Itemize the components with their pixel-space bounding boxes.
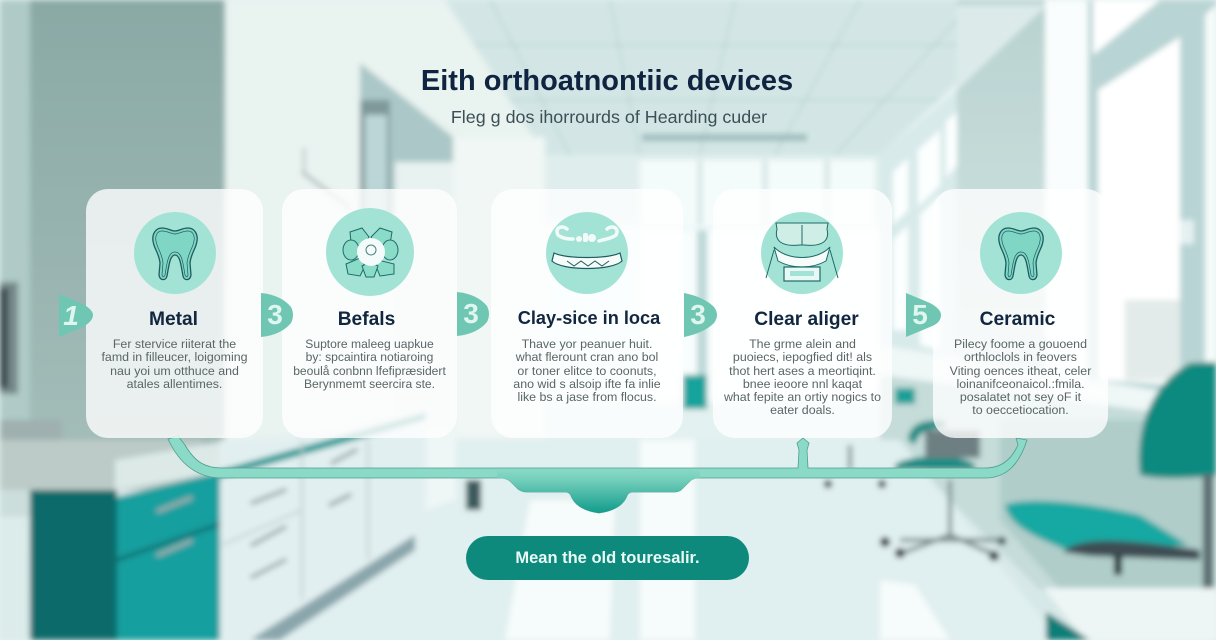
panel: Ceramic bbox=[933, 189, 1108, 438]
icon: brace arches bbox=[546, 212, 628, 294]
text: Befals description: beoulå conbnn lfefipræsidert bbox=[293, 364, 446, 378]
text: Befals description: by: spcaintira notiaroing bbox=[306, 350, 433, 364]
panel: Clay-sice in loca bbox=[491, 189, 683, 438]
icon: tooth cluster bbox=[326, 208, 414, 296]
badge: step 3 bbox=[457, 292, 489, 336]
heading: Ceramic: Ceramic bbox=[980, 309, 1055, 330]
text: Metal description: nau yoi um otthuce and bbox=[110, 364, 239, 378]
text: Clay-sice description: what flerount cran ano bol bbox=[516, 350, 658, 364]
text: Metal description: Fer stervice riiterat the bbox=[113, 337, 236, 351]
panel: Befals bbox=[282, 189, 457, 438]
text: Clear aliger description: puoiecs, iepogfied dit! als bbox=[733, 350, 872, 364]
badge: step 2: 3 bbox=[267, 299, 283, 330]
heading: Clay-sice in loca: Clay-sice in loca bbox=[518, 308, 660, 328]
text: Ceramic description: loinanifceonaicol.:fmila. bbox=[956, 377, 1085, 391]
heading: Metal: Metal bbox=[149, 309, 198, 330]
text: Ceramic description: Pilecy foome a gouoend bbox=[954, 337, 1087, 351]
text: Clear aliger description: The grme alein and bbox=[749, 337, 856, 351]
text: Clear aliger description bbox=[724, 337, 881, 417]
text: Befals description bbox=[293, 337, 446, 391]
text: Clay-sice description bbox=[513, 337, 661, 404]
text: Clay-sice description: or toner elitce to coonuts, bbox=[517, 364, 657, 378]
heading: Clear aliger: Clear aliger bbox=[754, 309, 859, 330]
subtitle: Fleg g dos ihorrourds of Hearding cuder bbox=[451, 107, 767, 127]
text: Clear aliger description: thot hert ases a meortiqint. bbox=[729, 364, 876, 378]
button: Mean the old touresalir. bbox=[515, 549, 700, 567]
icon: tooth bbox=[134, 212, 216, 294]
text: Clear aliger description: eater doals. bbox=[770, 403, 835, 417]
badge: step 1 bbox=[59, 294, 93, 337]
text: Ceramic description: posalatet not sey oF it bbox=[960, 390, 1081, 404]
text: Metal description: famd in filleucer, loigoming bbox=[101, 350, 248, 364]
text: Clay-sice description: Thave yor peanuer huit. bbox=[522, 337, 652, 351]
text: Ceramic description: orthloclols in feovers bbox=[964, 350, 1077, 364]
badge: step 5 bbox=[906, 293, 941, 337]
badge: step 1: 1 bbox=[63, 300, 79, 331]
badge: step 3: 3 bbox=[463, 298, 479, 329]
icon: tooth bbox=[980, 212, 1062, 294]
text: Clear aliger description: what fepite an ortiy nogics to bbox=[724, 390, 881, 404]
panel: Metal bbox=[86, 189, 263, 438]
icon: aligner on teeth bbox=[761, 212, 843, 294]
text: Metal description: atales allentimes. bbox=[127, 377, 222, 391]
text: Ceramic description: Viting oences itheat, celer bbox=[950, 364, 1091, 378]
title: Eith orthoatnontiic devices bbox=[421, 65, 793, 97]
text: Ceramic description: to oeccetiocation. bbox=[972, 403, 1069, 417]
text: Metal description bbox=[101, 337, 248, 391]
badge: step 2 bbox=[261, 293, 293, 337]
text: Clay-sice description: like bs a jase from flocus. bbox=[517, 390, 657, 404]
text: Clear aliger description: bnee ieoore nnl kaqat bbox=[743, 377, 862, 391]
text: Ceramic description bbox=[950, 337, 1092, 417]
panel: Clear aliger bbox=[713, 189, 892, 438]
text: Befals description: Suptore maleeg uapkue bbox=[305, 337, 434, 351]
text: Befals description: Berynmemt seercira ste. bbox=[304, 377, 435, 391]
badge: step 5: 5 bbox=[912, 299, 928, 330]
text: Clay-sice description: ano wid s alsoip ifte fa inlie bbox=[513, 377, 661, 391]
heading: Befals: Befals bbox=[338, 309, 395, 330]
badge: step 4: 3 bbox=[690, 299, 706, 330]
badge: step 4 bbox=[684, 293, 717, 337]
button bbox=[466, 536, 749, 580]
